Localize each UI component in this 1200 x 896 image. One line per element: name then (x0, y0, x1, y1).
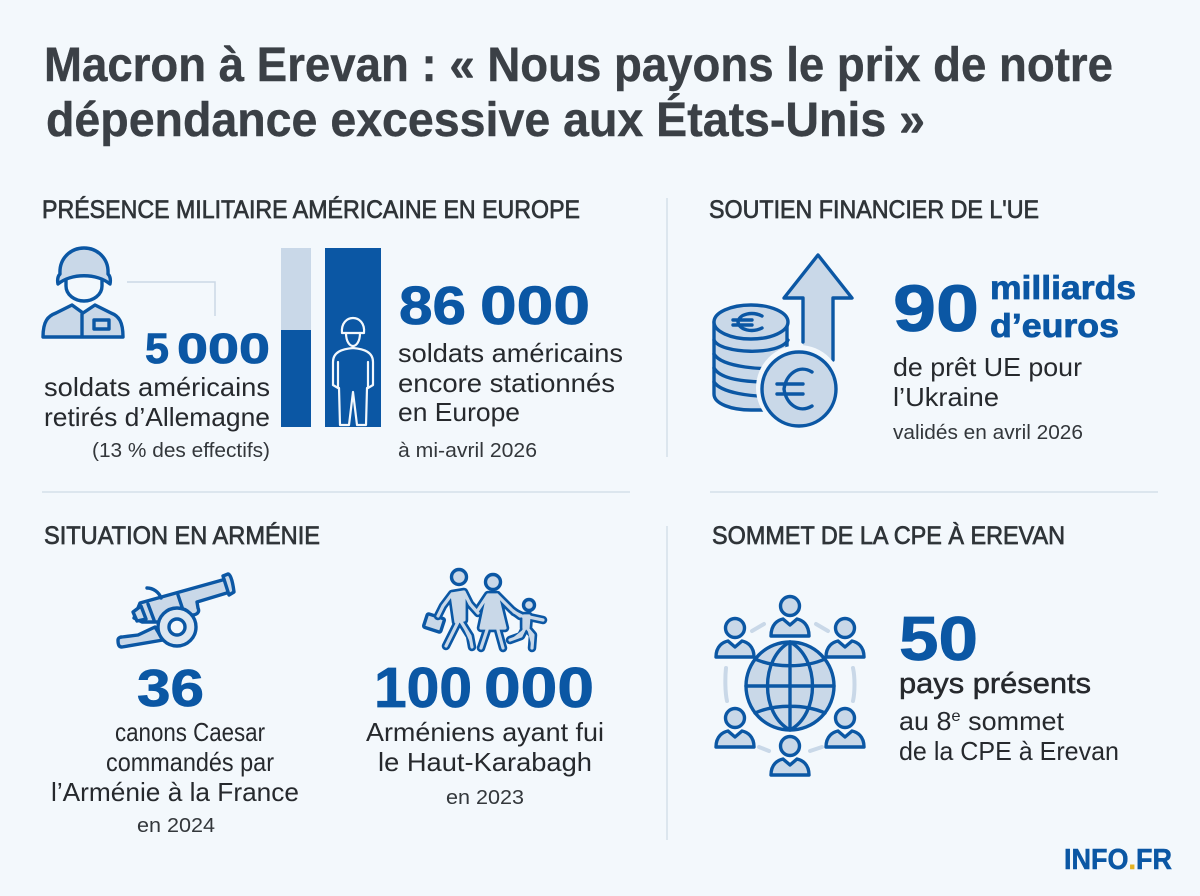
stat: 86 000 (399, 276, 590, 336)
note: validés: validés en avril 2026 (893, 422, 1083, 444)
icon: cannon (118, 574, 234, 647)
heading: présence militaire: PRÉSENCE MILITAIRE AMÉRICAINE EN EUROPE (42, 195, 580, 224)
logo: INFO.FR: INFO.FR (1064, 844, 1172, 876)
heading: soutien financier: SOUTIEN FINANCIER DE L'UE (709, 196, 1039, 224)
stat: 86 000: 000 (480, 276, 590, 336)
text: soldats stationnés: encore stationnés (398, 368, 615, 398)
icon: globe with people (716, 596, 864, 775)
text: Arméniens (366, 717, 604, 777)
text: 8e sommet: de la CPE à Erevan (899, 736, 1119, 766)
stat: 50: 50 (899, 605, 978, 674)
text: 8e sommet: e (951, 708, 961, 725)
icon: soldier (43, 248, 123, 337)
icon: family (423, 570, 543, 648)
connector line (127, 282, 215, 316)
heading: situation en Arménie: SITUATION EN ARMÉNIE (44, 521, 320, 550)
note: 13 %: (13 % des effectifs) (92, 440, 270, 462)
stat: 86 000: 86 (399, 276, 466, 336)
panel: situation en Arménie (44, 521, 604, 837)
stat unit: milliards d'euros: d’euros (990, 307, 1119, 344)
stat: 5 000: 000 (177, 325, 270, 373)
text: canons Caesar (51, 717, 299, 807)
text: pays présents: pays présents (899, 668, 1091, 700)
stat: 5 000 (145, 325, 270, 373)
stat unit: milliards d'euros (990, 269, 1136, 344)
stat: 90: 90 (893, 271, 979, 345)
stat: 100 000: 000 (484, 656, 594, 720)
text: soldats stationnés: soldats américains (398, 338, 623, 368)
text: prêt UE: l’Ukraine (893, 382, 999, 412)
title: dépendance excessive aux États-Unis » (46, 93, 925, 147)
note: en 2024: en 2024 (137, 815, 215, 837)
panel: sommet de la CPE (712, 521, 1119, 775)
text: soldats retirés: retirés d’Allemagne (44, 402, 270, 432)
icon: soldier silhouette (333, 318, 373, 425)
text: canons Caesar: canons Caesar (115, 717, 265, 747)
icon: euro coins and arrow (714, 255, 852, 431)
stat: 36: 36 (137, 660, 204, 718)
stat: 100 000 (374, 656, 594, 720)
panel: soutien financier (709, 196, 1136, 444)
text: 8e sommet (899, 706, 1119, 766)
text: canons Caesar: commandés par (106, 747, 274, 777)
title (44, 39, 1113, 147)
text: Arméniens: le Haut-Karabagh (378, 747, 592, 777)
text: 8e sommet: au 8 (899, 706, 950, 736)
text: soldats retirés: soldats américains (44, 372, 270, 402)
heading: sommet CPE: SOMMET DE LA CPE À EREVAN (712, 521, 1065, 550)
note: en 2023: en 2023 (446, 787, 524, 809)
text: soldats stationnés (398, 338, 623, 427)
text: Arméniens: Arméniens ayant fui (366, 717, 604, 747)
text: prêt UE (893, 352, 1082, 412)
stat: 5 000: 5 (145, 325, 169, 373)
outlined limbs: dark stroke below, light stroke above (438, 592, 543, 648)
bar chart: effectifs (281, 248, 381, 427)
title: Macron à Erevan : « Nous payons le prix de notre (44, 39, 1113, 92)
text: canons Caesar: l’Arménie à la France (51, 777, 299, 807)
text: soldats stationnés: en Europe (398, 397, 520, 427)
note: mi-avril 2026: à mi-avril 2026 (398, 440, 537, 462)
stat unit: milliards d'euros: milliards (990, 269, 1136, 306)
text: prêt UE: de prêt UE pour (893, 352, 1082, 382)
panel: présence militaire américaine (42, 195, 623, 462)
stat: 100 000: 100 (374, 656, 472, 720)
text: soldats retirés (44, 372, 270, 432)
text: 8e sommet: sommet (961, 706, 1065, 736)
